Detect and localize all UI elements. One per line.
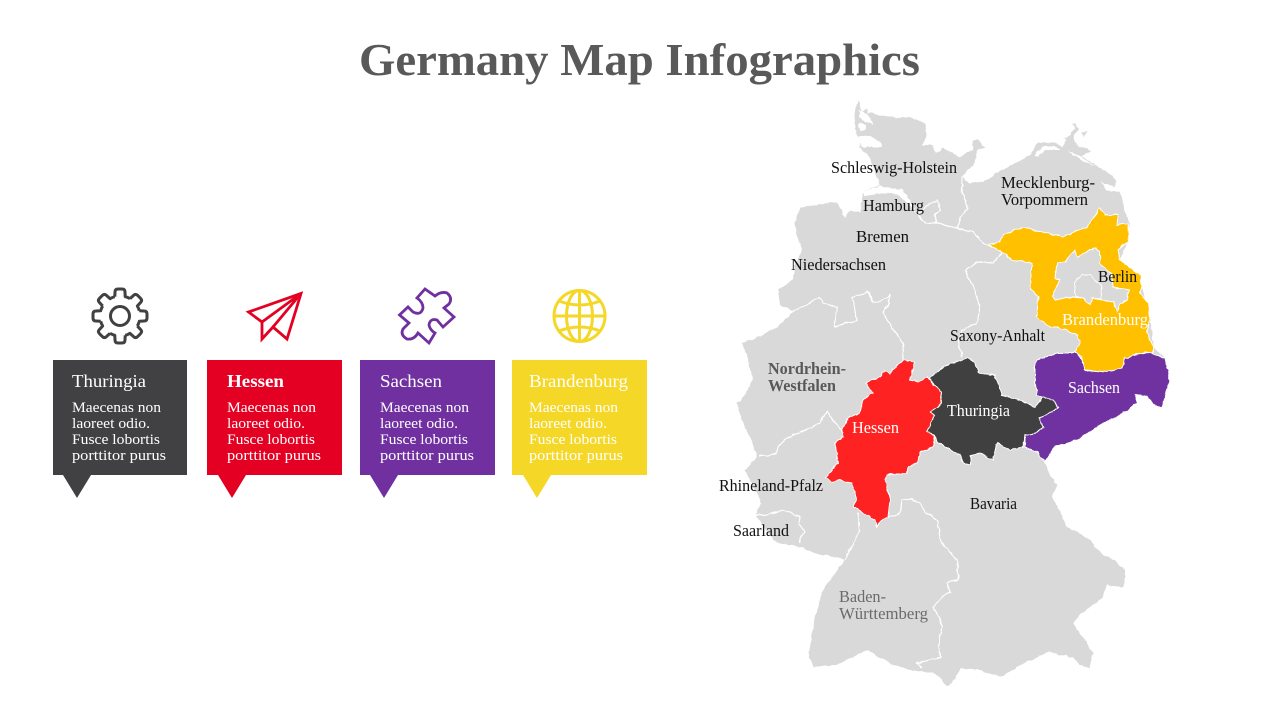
text block: Thuringia: porttitor purus (72, 448, 166, 464)
label: Niedersachsen: Niedersachsen (791, 255, 886, 274)
icon: globe (554, 290, 605, 342)
icon: paper plane (248, 294, 301, 339)
label: Baden-Württemberg: Baden- (839, 587, 886, 606)
heading: Sachsen: Sachsen (380, 371, 442, 391)
label: Berlin: Berlin (1098, 267, 1137, 286)
text block: Thuringia: laoreet odio. (72, 416, 150, 432)
label: Bremen: Bremen (856, 227, 909, 246)
map: shapes (737, 100, 1170, 687)
map region: Sachsen (1025, 352, 1170, 462)
callout box: Thuringia (53, 360, 187, 498)
label: Baden-Württemberg (839, 587, 928, 623)
label: Sachsen: Sachsen (1068, 378, 1120, 397)
text block: Sachsen: laoreet odio. (380, 416, 458, 432)
label: Hessen: Hessen (852, 418, 899, 437)
map region: Brandenburg (988, 208, 1154, 372)
label: Thuringia: Thuringia (947, 401, 1011, 420)
text block: Brandenburg: Maecenas non (529, 400, 619, 416)
title: Germany Map Infographics (359, 34, 920, 85)
label: Hamburg: Hamburg (863, 196, 924, 215)
map: base land (737, 100, 1170, 687)
text block: Hessen: Maecenas non (227, 400, 317, 416)
map of Germany (719, 100, 1170, 687)
map region: Thuringia (927, 358, 1058, 465)
text block: Thuringia: Fusce lobortis (72, 432, 160, 448)
icon: gear (93, 289, 147, 343)
text block: Brandenburg: porttitor purus (529, 448, 623, 464)
text block: Brandenburg (529, 400, 623, 464)
text block: Thuringia (72, 400, 166, 464)
label: Nordrhein-Westfalen: Westfalen (768, 376, 836, 395)
text block: Sachsen: Fusce lobortis (380, 432, 468, 448)
text block: Sachsen (380, 400, 474, 464)
label: Mecklenburg-Vorpommern (1001, 173, 1095, 209)
callout box: Hessen (207, 360, 342, 498)
callout box: Sachsen (360, 360, 495, 498)
label: Brandenburg: Brandenburg (1062, 310, 1148, 329)
text block: Brandenburg: Fusce lobortis (529, 432, 617, 448)
map region: Berlin (1075, 275, 1102, 305)
callout box: Brandenburg (512, 360, 647, 498)
label: Saarland: Saarland (733, 521, 790, 540)
panel: Sachsen (360, 289, 495, 498)
text block: Brandenburg: laoreet odio. (529, 416, 607, 432)
panel: Thuringia (53, 289, 187, 498)
panel: Hessen (207, 294, 342, 498)
text block: Thuringia: Maecenas non (72, 400, 162, 416)
map: state borders (755, 177, 1003, 668)
map region: Hessen (826, 360, 942, 527)
icon: puzzle piece (400, 289, 454, 343)
map labels (719, 158, 1148, 623)
text block: Hessen: porttitor purus (227, 448, 321, 464)
label: Schleswig-Holstein: Schleswig-Holstein (831, 158, 957, 177)
text block: Hessen: Fusce lobortis (227, 432, 315, 448)
label: Saxony-Anhalt: Saxony-Anhalt (950, 326, 1045, 345)
text block: Hessen: laoreet odio. (227, 416, 305, 432)
label: Baden-Württemberg: Württemberg (839, 604, 928, 623)
map: coastal inlets and Elbe estuary (856, 110, 1095, 214)
heading: Brandenburg: Brandenburg (529, 371, 628, 391)
label: Mecklenburg-Vorpommern: Mecklenburg- (1001, 173, 1095, 192)
label: Nordrhein-Westfalen (768, 359, 846, 395)
heading: Hessen: Hessen (227, 371, 284, 391)
panel: Brandenburg (512, 290, 647, 498)
label: Rhineland-Pfalz: Rhineland-Pfalz (719, 476, 823, 495)
text block: Sachsen: Maecenas non (380, 400, 470, 416)
text block: Sachsen: porttitor purus (380, 448, 474, 464)
label: Nordrhein-Westfalen: Nordrhein- (768, 359, 846, 378)
heading: Thuringia: Thuringia (72, 371, 146, 391)
label: Bavaria: Bavaria (970, 494, 1018, 513)
label: Mecklenburg-Vorpommern: Vorpommern (1001, 190, 1088, 209)
text block: Hessen (227, 400, 321, 464)
